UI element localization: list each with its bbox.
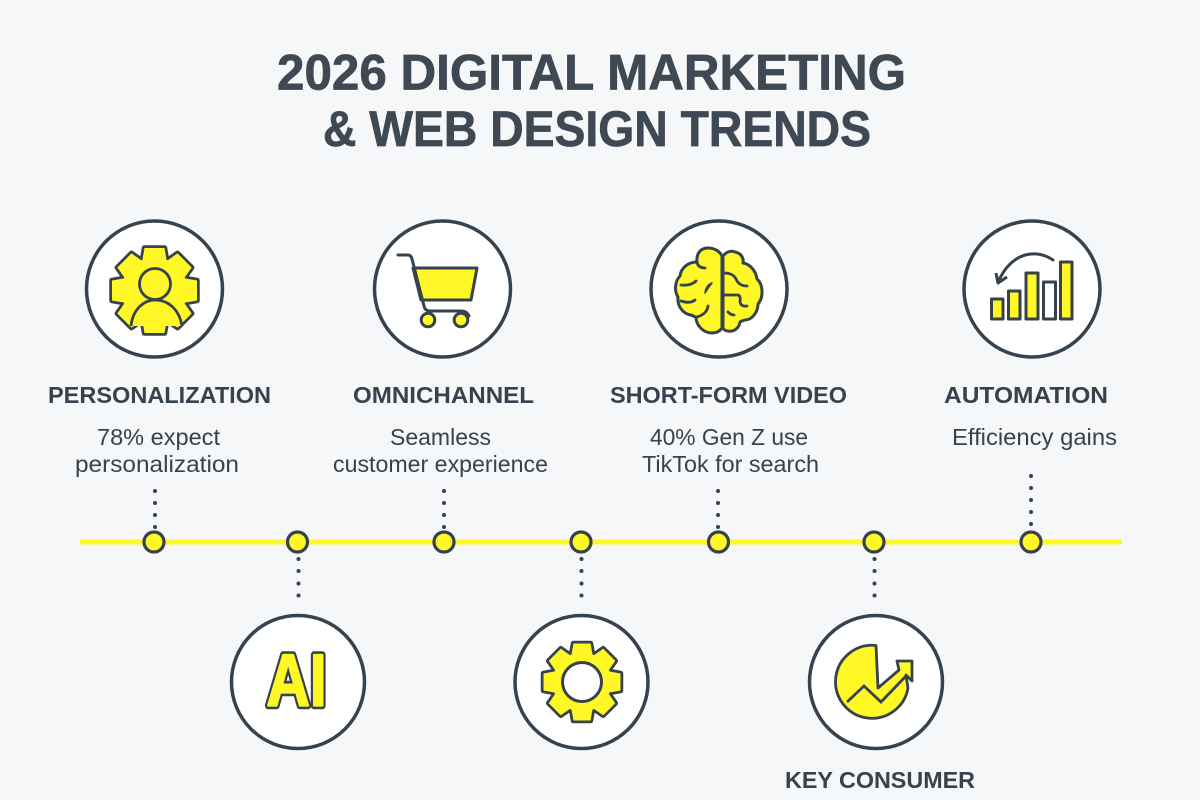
panel: AI — [232, 616, 364, 748]
title — [277, 44, 906, 157]
icon: shopping cart — [374, 221, 510, 357]
icon: AI letters — [232, 616, 364, 748]
timeline nodes — [144, 532, 1041, 552]
icon: gear — [515, 616, 648, 748]
title: & WEB DESIGN TRENDS — [323, 101, 871, 157]
description: personalization — [75, 451, 239, 477]
heading: OMNICHANNEL — [353, 382, 534, 408]
description: 78% expect — [97, 424, 221, 450]
icon: AI letters: AI — [266, 640, 326, 722]
description: customer experience — [333, 451, 548, 477]
panel: short-form video — [610, 221, 847, 477]
panel: gear — [515, 616, 648, 748]
description — [75, 424, 239, 477]
description — [642, 424, 819, 477]
timeline line — [80, 540, 1122, 544]
icon: AI letters: AI — [266, 640, 326, 722]
description: Seamless — [390, 424, 491, 450]
dotted connectors — [153, 474, 1033, 598]
heading: KEY CONSUMER — [785, 767, 975, 793]
panel: key consumer — [785, 616, 975, 793]
icon: pie chart with arrow — [810, 616, 942, 748]
heading: SHORT-FORM VIDEO — [610, 382, 847, 408]
panel: omnichannel — [333, 221, 548, 477]
icon: gear with person — [86, 221, 222, 357]
heading: PERSONALIZATION — [48, 382, 271, 408]
description: Efficiency gains — [952, 424, 1117, 450]
panel: personalization — [48, 221, 271, 477]
title: 2026 DIGITAL MARKETING — [277, 44, 906, 100]
description — [333, 424, 548, 477]
panel: automation — [944, 221, 1117, 450]
heading: AUTOMATION — [944, 382, 1108, 408]
description: 40% Gen Z use — [650, 424, 808, 450]
icon: brain — [651, 221, 787, 357]
description: TikTok for search — [642, 451, 819, 477]
icon: bars with arrow — [964, 221, 1100, 357]
